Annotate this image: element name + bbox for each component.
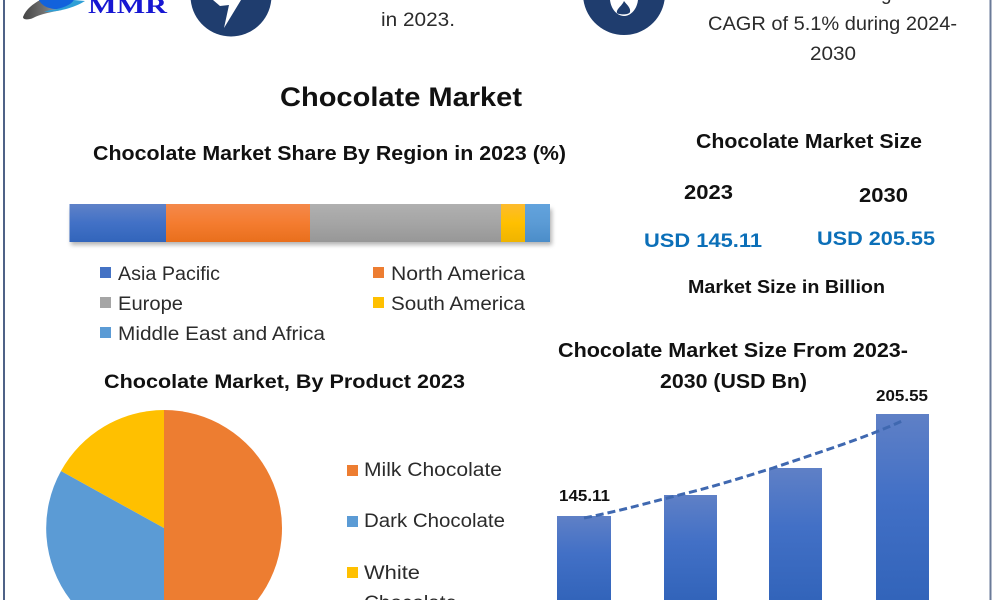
bar chart	[557, 414, 929, 600]
label: 145.11: 145.11	[559, 488, 610, 505]
heading: size over time	[558, 340, 908, 393]
stat: 2023: 2023	[684, 182, 733, 204]
icon: lightning bolt	[191, 0, 271, 36]
legend: regions: Asia Pacific	[118, 264, 220, 285]
legend: regions	[100, 264, 525, 345]
stat: 2030: USD 205.55	[817, 228, 935, 250]
heading: by product: Chocolate Market, By Product 2023	[104, 371, 465, 393]
legend: regions: Europe	[118, 294, 183, 315]
pie chart	[46, 410, 282, 600]
panel: market size	[644, 131, 935, 297]
panel: market share by region	[70, 143, 566, 345]
label: 205.55: 205.55	[876, 388, 928, 405]
text: CAGR note	[708, 0, 957, 65]
icon: flame	[583, 0, 665, 35]
panel: by product	[46, 371, 505, 600]
stacked bar	[70, 204, 552, 245]
text: CAGR note: 2030	[810, 44, 856, 65]
stat: 2023	[644, 182, 762, 252]
logo: MMR	[23, 0, 169, 19]
legend: regions: South America	[391, 294, 525, 315]
heading: size over time: Chocolate Market Size From 2023-	[558, 340, 908, 362]
stat: 2023: USD 145.11	[644, 230, 762, 252]
legend: regions: Middle East and Africa	[118, 324, 325, 345]
heading: share by region: Chocolate Market Share By Region in 2023 (%)	[93, 143, 566, 165]
heading: size over time: 2030 (USD Bn)	[660, 371, 807, 393]
heading: market size: Chocolate Market Size	[696, 131, 922, 153]
legend: products: Dark Chocolate	[364, 511, 505, 532]
text: base year note: in 2023.	[381, 10, 455, 31]
legend: regions: North America	[391, 264, 525, 285]
title: Chocolate Market	[280, 82, 522, 112]
legend: products	[347, 460, 505, 600]
text: CAGR note: CAGR of 5.1% during 2024-	[708, 14, 957, 35]
panel: market size 2023-2030	[557, 340, 929, 600]
stat: 2030: 2030	[859, 185, 908, 207]
legend: products: White	[364, 563, 420, 584]
legend: products: Milk Chocolate	[364, 460, 502, 481]
stat: 2030	[817, 185, 935, 250]
trend line	[584, 421, 902, 518]
caption: unit: Market Size in Billion	[688, 276, 885, 297]
